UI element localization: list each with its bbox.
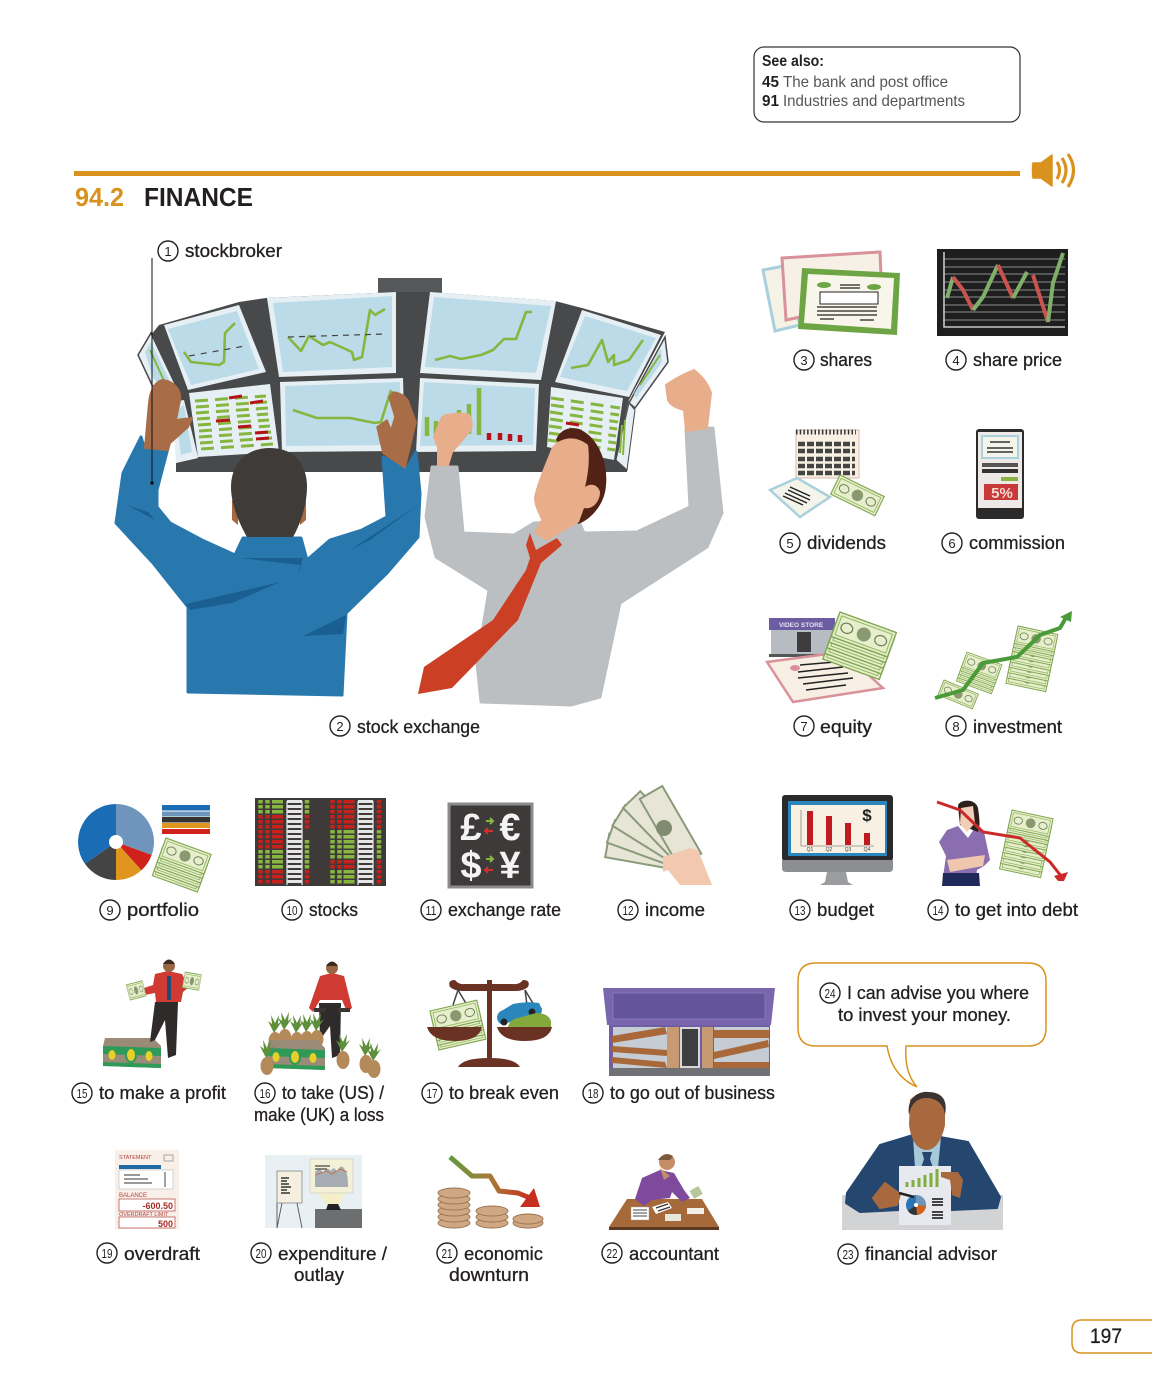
label 6: commission: commission [969,533,1065,553]
label 10: stocks [282,900,358,920]
label 20: expenditure / outlay: 20 [256,1246,266,1261]
icon: dividends [770,430,884,517]
icon: phone with commission [976,429,1024,519]
icon: overdraft statement: OVERDRAFT LIMIT [119,1212,169,1218]
see also box [754,47,1020,122]
icon: equity [767,612,896,702]
label 16: to take a loss: make (UK) a loss [254,1105,384,1125]
section rule [74,171,1020,176]
icon: scales [427,980,552,1067]
icon: expenditure presentation [265,1155,362,1228]
heading [75,182,253,212]
heading: 94.2 [75,182,124,212]
label 3: shares [794,350,872,370]
icon: phone with commission: 5% [991,485,1013,502]
label 7: equity [794,716,872,737]
blue shirt man [116,380,420,695]
label 13: budget: 13 [794,903,806,918]
grey shirt man [418,370,722,705]
icon: equity: VIDEO STORE [779,622,824,629]
icon: exchange rate board: ¥ [499,845,521,887]
label 14: to get into debt: to get into debt [955,900,1078,920]
icon: budget monitor: Q3 [845,847,852,853]
label 14: to get into debt: 14 [932,903,944,918]
label 23: financial advisor: financial advisor [865,1244,997,1264]
icon: exchange rate board: € [499,807,521,849]
label 10: stocks: 10 [286,903,298,918]
see also box: Industries and departments [783,93,965,110]
label 9: portfolio: 9 [106,903,114,918]
label 24: 24 [824,986,836,1001]
label 20: expenditure / outlay: outlay [294,1265,344,1285]
label 2: stock exchange: 2 [336,719,344,734]
speech bubble [798,963,1046,1087]
label 4: share price: share price [973,350,1062,370]
see also box: 91 [762,93,779,110]
icon: income hand with money [605,786,712,885]
icon: exchange rate board: £ [460,807,482,849]
icon: exchange rate board [449,804,532,887]
label 2: stock exchange: stock exchange [357,717,480,737]
label 21: economic downturn [437,1243,543,1285]
label 22: accountant: 22 [606,1246,618,1261]
icon: budget monitor: Q4 [864,847,871,853]
charts on screens [150,309,660,455]
label 10: stocks: stocks [309,900,358,920]
label 15: to make a profit: to make a profit [99,1083,226,1103]
label 7: equity: equity [820,717,872,737]
label 17: to break even: to break even [449,1083,559,1103]
icon: budget monitor [782,795,893,885]
page number tab [1072,1320,1152,1353]
icon: exchange rate board: $ [460,845,482,887]
icon: speaker [1032,154,1074,187]
label 6: commission: 6 [948,536,956,551]
label 24: to invest your money. [838,1005,1011,1025]
label 11: exchange rate: exchange rate [448,900,561,920]
label 7: equity: 7 [800,719,808,734]
page number tab: 197 [1090,1325,1122,1348]
see also box: 45 [762,74,779,91]
icon: overdraft statement: STATEMENT [119,1155,152,1161]
label 12: income: 12 [622,903,634,918]
label 12: income [618,900,705,920]
label 20: expenditure / outlay [251,1243,387,1285]
label 15: to make a profit: 15 [76,1086,88,1101]
label 9: portfolio [100,900,199,920]
label 19: overdraft [97,1243,200,1264]
label 19: overdraft: 19 [102,1246,112,1261]
label 3: shares: shares [820,350,872,370]
label 1: stockbroker: stockbroker [185,241,282,261]
icon: budget monitor: $ [862,806,872,825]
icon: financial advisor [842,1092,1003,1230]
icon: overdraft statement [115,1150,179,1229]
icon: debt [937,801,1068,886]
label 8: investment: 8 [952,719,960,734]
label 5: dividends: dividends [807,533,886,553]
label 3: shares: 3 [800,353,808,368]
label 16: to take a loss: 16 [260,1086,270,1101]
label 4: share price: 4 [952,353,960,368]
icon: economic downturn [438,1157,543,1228]
label 18: to go out of business: to go out of business [610,1083,775,1103]
icon: budget monitor: Q2 [826,847,833,853]
label 20: expenditure / outlay: expenditure / [278,1244,387,1264]
label 22: accountant: accountant [629,1244,719,1264]
data tables on screens [195,396,620,450]
heading: FINANCE [144,182,253,212]
illustration: stock exchange [116,278,722,705]
label 24 [820,983,1029,1025]
icon: overdraft statement: BALANCE [119,1193,147,1199]
see also box: The bank and post office [783,74,948,91]
see also box: See also: [762,53,824,70]
label 24: I can advise you where [847,983,1029,1003]
icon: accountant [609,1154,719,1230]
label 16: to take a loss [254,1083,384,1125]
icon: shares [763,252,900,335]
monitor wall [138,278,668,472]
label 9: portfolio: portfolio [127,900,199,920]
icon: to make a profit [103,960,202,1068]
label 17: to break even: 17 [426,1086,438,1101]
label 21: economic downturn: downturn [449,1265,529,1285]
icon: overdraft statement: 500 [158,1219,173,1229]
label 21: economic downturn: 21 [442,1246,452,1261]
icon: overdraft statement: -600.50 [142,1201,173,1211]
label 13: budget [790,900,874,920]
icon: portfolio pie chart [78,804,211,892]
label 23: financial advisor: 23 [842,1247,854,1262]
label 1: stockbroker: 1 [164,244,172,259]
leader line: stockbroker [150,258,154,485]
label 16: to take a loss: to take (US) / [282,1083,384,1103]
icon: investment [935,611,1072,709]
label 19: overdraft: overdraft [124,1244,200,1264]
icon: budget monitor: Q1 [807,847,814,853]
label 12: income: income [645,900,705,920]
icon: stocks board [255,798,386,886]
icon: share price chart [937,249,1068,336]
icon: closed shop [603,988,775,1076]
label 21: economic downturn: economic [464,1244,543,1264]
label 5: dividends: 5 [786,536,794,551]
label 11: exchange rate: 11 [426,903,436,918]
label 13: budget: budget [817,900,874,920]
label 8: investment: investment [973,717,1062,737]
icon: to take a loss [260,962,381,1078]
label 18: to go out of business: 18 [588,1086,598,1101]
